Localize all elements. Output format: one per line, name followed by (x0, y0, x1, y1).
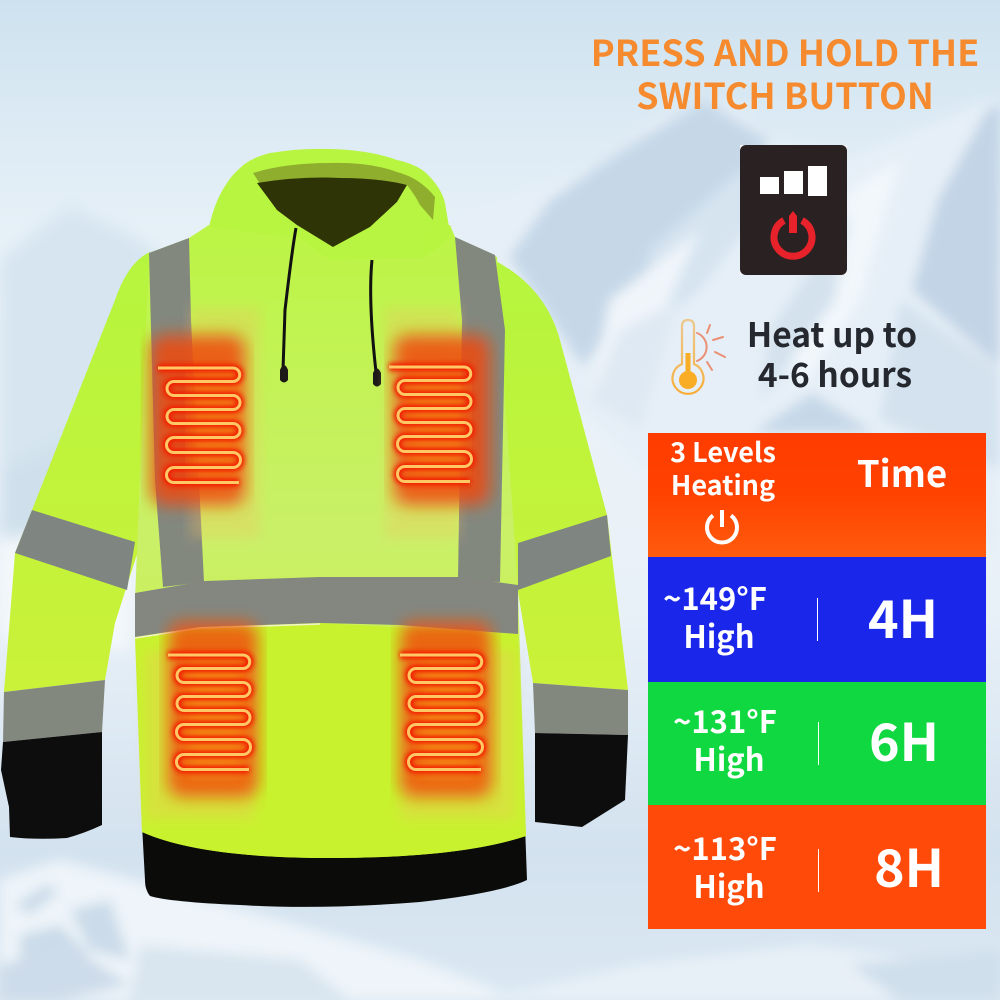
row: 131F: ~131°F (673, 697, 777, 742)
row: 131F: 6H (869, 701, 939, 776)
warm heat glow areas (145, 308, 515, 820)
coil: lower right (400, 655, 482, 770)
coil: upper right (389, 367, 472, 482)
heat duration text (747, 308, 917, 397)
row: 131F: High (693, 735, 765, 780)
row: high 149F: ~149°F (663, 574, 767, 619)
pocket top edge (135, 624, 320, 638)
right vertical reflective strap (455, 237, 505, 582)
torso (135, 225, 526, 858)
heading: SWITCH BUTTON (636, 68, 934, 120)
cord tips (280, 365, 381, 386)
coil: lower left (168, 655, 250, 770)
row: high 149F: High (683, 612, 755, 657)
heading: PRESS AND HOLD THE (591, 25, 979, 77)
hood outer (209, 149, 450, 260)
hoodie (1, 149, 628, 907)
heat duration text: Heat up to (747, 308, 917, 357)
table header: Heating (671, 464, 775, 503)
drawstring left (283, 228, 296, 370)
left vertical reflective strap (149, 238, 204, 587)
heating levels table (648, 431, 986, 929)
icon: switch button (740, 145, 847, 275)
row: 113F (648, 805, 986, 929)
heating coils (158, 367, 482, 770)
hood lining (253, 163, 435, 247)
pocket (135, 623, 526, 858)
hood right fold (318, 185, 433, 258)
left sleeve (1, 252, 160, 839)
table header (648, 431, 986, 557)
row: 113F: High (693, 862, 765, 907)
table header: Time (857, 445, 947, 498)
row: 113F: ~113°F (673, 824, 777, 869)
heading (591, 25, 979, 120)
horizontal reflective band (135, 577, 518, 637)
coil: upper left (158, 368, 240, 482)
icon: thermometer with sun (672, 320, 725, 394)
row: 131F (648, 682, 986, 805)
table header: 3 Levels (670, 431, 776, 470)
row: 113F: 8H (874, 827, 944, 902)
row: high 149F (648, 557, 986, 682)
hood opening (257, 178, 407, 247)
drawstring right (371, 260, 376, 372)
black hem (142, 825, 527, 907)
right sleeve (490, 258, 628, 827)
row: high 149F: 4H (868, 578, 938, 653)
heat duration text: 4-6 hours (758, 348, 912, 397)
